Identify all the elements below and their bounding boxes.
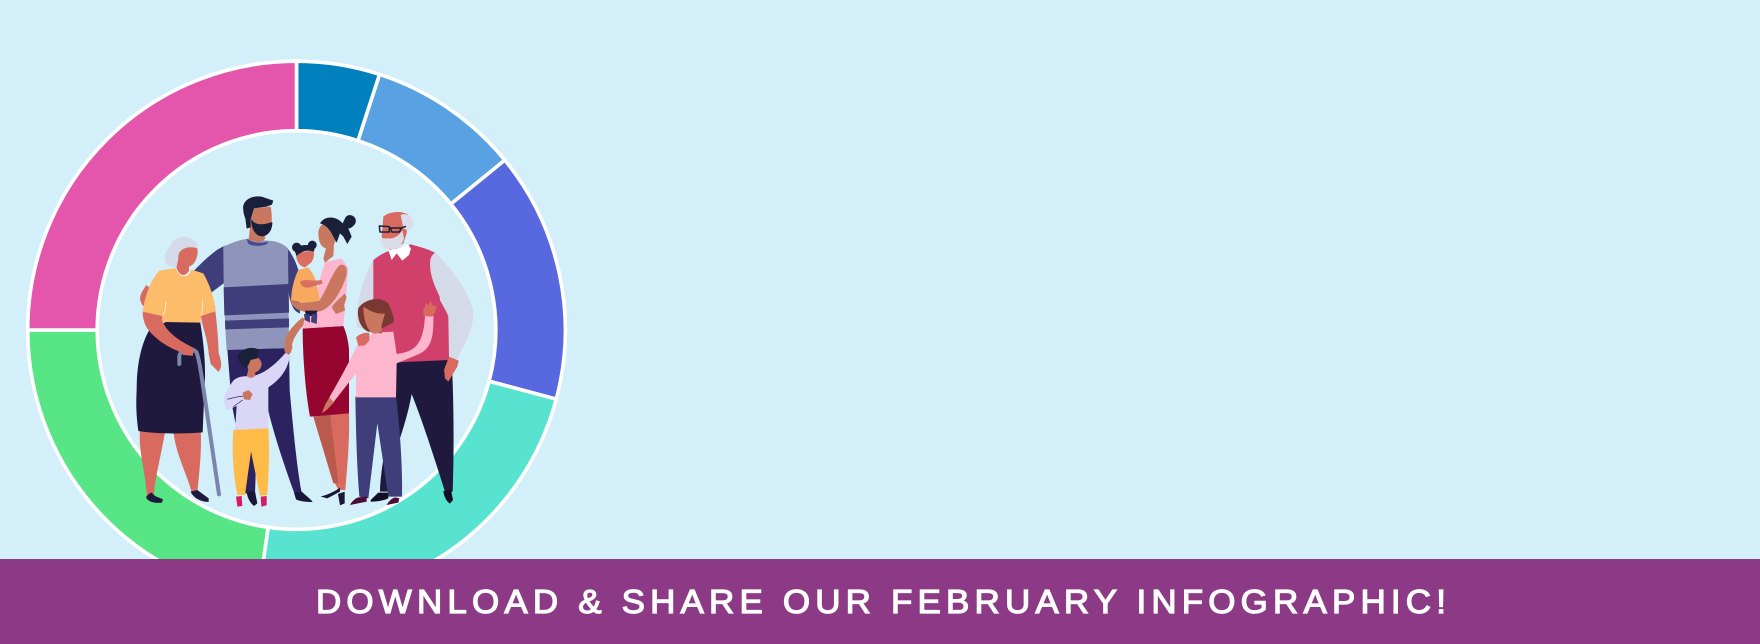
segment: indigo [451,160,565,399]
segment: light blue [358,74,505,204]
figure: mother and toddler [284,215,356,505]
donut chart [28,61,565,599]
segment: green [28,330,268,596]
figure: grandmother [136,237,221,503]
figure: boy [224,343,293,507]
banner text: DOWNLOAD & SHARE OUR FEBRUARY INFOGRAPHIC! [316,584,1446,621]
figure: father [194,196,313,506]
segment: pink [28,61,296,330]
figure: grandfather [357,212,473,504]
figure: girl [322,299,437,505]
family illustration [136,196,473,507]
banner [0,559,1760,644]
segment: aqua [258,381,556,599]
segment: dark blue [296,61,380,141]
